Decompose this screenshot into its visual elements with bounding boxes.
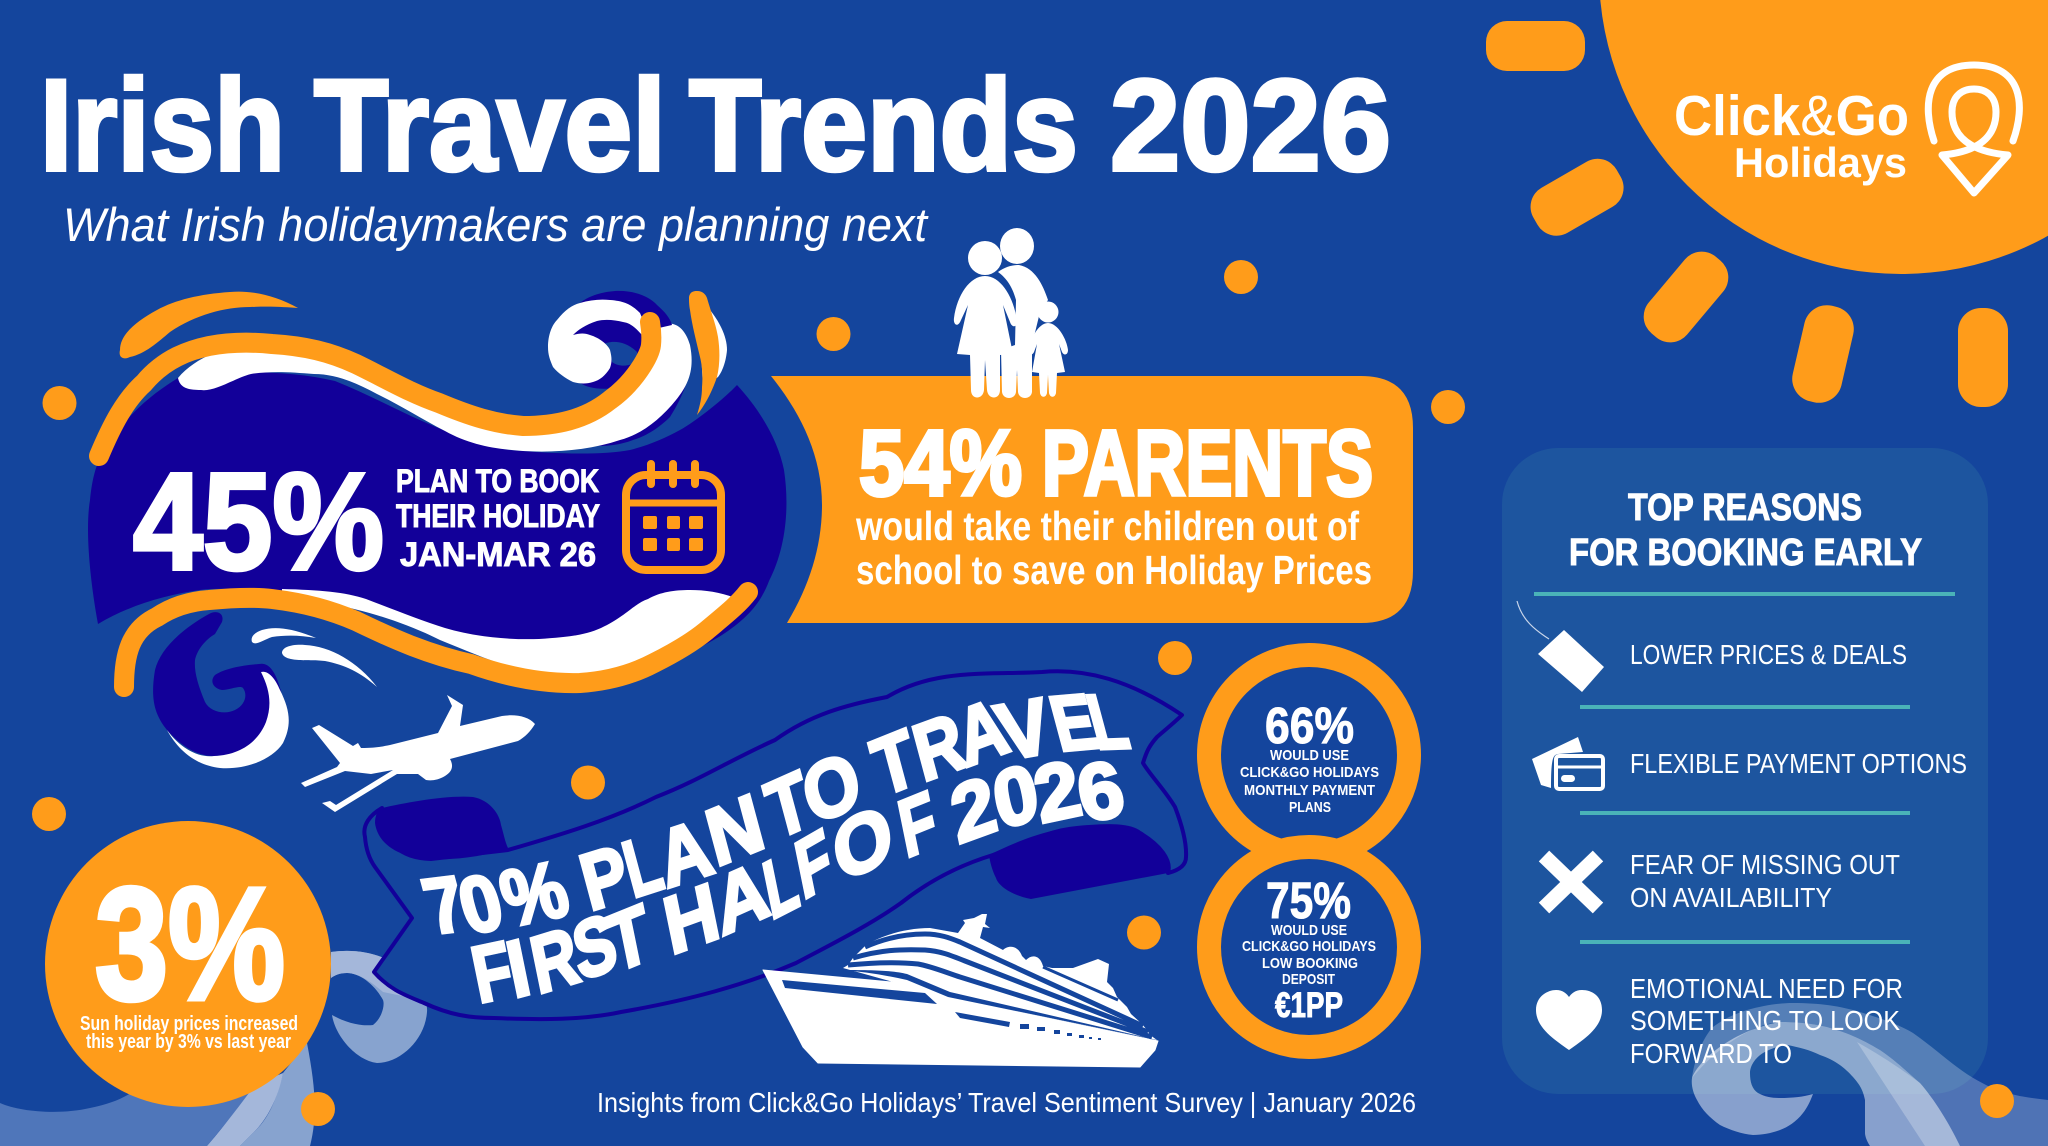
wave: bottom right [1692,1003,2048,1146]
wave: dark blob [88,372,786,675]
banner text line 2: 2 [1027,743,1088,840]
wave: small white splash 1 [252,628,316,643]
circle: 66 percent [1209,655,1409,855]
logo wordmark [1674,84,1909,186]
icon: cruise ship [763,914,1158,1067]
sun holiday text [80,1013,298,1053]
banner text line 2: O [826,786,900,900]
circle: 3 percent [45,821,331,1107]
banner text line 2: 0 [986,746,1046,847]
wave: lower white crest [282,589,735,680]
reason: emotional need: FORWARD TO [1630,1038,1792,1069]
banner text line 1: R [904,695,974,799]
low deposit text [1242,922,1376,988]
monthly payment text: PLANS [1289,799,1331,816]
plan to book text: JAN-MAR 26 [400,536,596,574]
logo wordmark: Holidays [1734,139,1907,186]
decorative orange dots [32,260,2014,1126]
banner text line 1: N [697,776,772,884]
panel: top reasons background [1502,448,1988,1094]
sun holiday text: Sun holiday prices increased [80,1013,298,1035]
wave: spike orange [689,291,719,415]
icon: plane [301,695,535,812]
title: Irish [40,52,285,198]
parents body text: school to save on Holiday Prices [856,547,1372,593]
banner text line 2: S [566,896,624,998]
monthly payment text: WOULD USE [1270,747,1349,764]
footer source note: Insights from Click&Go Holidays’ Travel Sentiment Survey | January 2026 [597,1087,1416,1118]
low deposit text: WOULD USE [1271,922,1347,939]
panel heading [1569,487,1922,574]
wave: lower swirl dark [153,612,281,756]
banner text line 1: % [491,845,577,944]
banner text line 2 [465,743,1131,1020]
panel heading: FOR BOOKING EARLY [1569,532,1922,574]
sun [1486,0,2048,407]
circle: 75 percent [1209,847,1409,1047]
banner text line 1: V [987,681,1060,777]
wave: curl inner lens [602,342,638,366]
monthly payment text [1240,747,1379,816]
panel: parents [771,376,1413,623]
banner text line 2: T [601,887,657,990]
title [40,52,1391,198]
banner text line 2: A [707,842,776,953]
wave: upper white crest [178,324,692,452]
logo wordmark: Click&Go [1674,84,1909,148]
ring [1209,847,1409,1047]
banner text line 2: I [500,923,537,1016]
54 percent parents heading [859,411,1373,515]
plan to book text: THEIR HOLIDAY [396,498,600,534]
parents body text: would take their children out of [855,503,1359,549]
plan to book text: PLAN TO BOOK [396,463,599,499]
3 percent number: 3% [95,854,285,1033]
banner: 70 percent [364,671,1186,1020]
low deposit text: LOW BOOKING [1262,955,1358,972]
banner text line 1: E [1042,678,1106,768]
reason: flexible payment: FLEXIBLE PAYMENT OPTIONS [1630,748,1967,779]
wave: dark crescent right [598,355,691,446]
banner text line 1: 7 [414,860,475,951]
wave: spike white [700,310,727,388]
wave: small white splash 2 [282,645,377,687]
plan to book text [396,463,600,574]
sun holiday text: this year by 3% vs last year [86,1031,291,1053]
45 percent number: 45% [133,445,384,599]
reason: emotional need: SOMETHING TO LOOK [1630,1005,1900,1036]
banner text line 2: L [756,833,805,937]
75 percent number: 75% [1266,872,1351,929]
banner text line 1: O [793,734,870,842]
ring [1209,655,1409,855]
monthly payment text: CLICK&GO HOLIDAYS [1240,764,1379,781]
sun disc [1599,0,2048,274]
banner text line 2: F [892,773,943,875]
sun rays [1486,21,2008,407]
banner text line 2: 2 [944,758,1003,861]
66 percent number: 66% [1265,697,1354,754]
parents body text [855,503,1372,593]
low deposit text: DEPOSIT [1282,971,1335,988]
monthly payment text: MONTHLY PAYMENT [1244,782,1375,799]
reason: emotional need [1630,973,1903,1069]
banner fold left [375,797,508,859]
wave panel: 45 percent wave [88,291,786,768]
icon: family [954,228,1068,398]
reason: fear of missing out: ON AVAILABILITY [1630,882,1832,913]
icon: calendar [626,464,721,570]
banner fold right [989,826,1169,899]
icon: credit cards [1532,737,1603,789]
wave: curl white [548,300,645,384]
banner text line 2: F [465,925,520,1020]
banner text line 1: L [1078,678,1137,766]
banner text line 2: 6 [1070,744,1131,839]
title: Travel [314,52,666,198]
panel: top reasons content [1517,487,1967,1069]
banner text line 2: F [789,811,838,917]
logo pin [1928,65,2019,193]
1 euro deposit: €1PP [1275,986,1343,1025]
54 percent parents heading: 54% [859,411,1022,515]
icon: cross [1544,856,1598,908]
wave: lower swirl white [167,672,289,768]
banner text line 1 [414,678,1137,951]
icon: price tag [1517,601,1604,692]
54 percent parents heading: PARENTS [1042,411,1373,515]
banner text line 2: H [656,865,726,972]
banner text line 2: R [524,910,586,1011]
logo: Click&Go Holidays [1674,65,2019,193]
reason: emotional need: EMOTIONAL NEED FOR [1630,973,1903,1004]
banner ribbon [364,671,1186,1019]
reason: lower prices: LOWER PRICES & DEALS [1630,639,1907,670]
banner text line 1: P [571,828,638,928]
panel heading: TOP REASONS [1628,487,1862,529]
low deposit text: CLICK&GO HOLIDAYS [1242,938,1376,955]
wave: curl dark [573,291,672,389]
banner text line 1: T [863,712,925,814]
icon: heart [1536,990,1602,1050]
banner text line 1: 0 [449,858,512,951]
banner text line 1: A [947,680,1017,784]
45 percent stat [133,445,600,599]
title: Trends [689,52,1078,198]
reason: fear of missing out: FEAR OF MISSING OUT [1630,849,1900,880]
title: 2026 [1110,52,1391,198]
wave: upper orange stroke [99,322,651,456]
banner text line 1: A [648,803,721,905]
banner text line 1: T [757,753,818,857]
reason: fear of missing out [1630,849,1900,913]
parents orange shape [771,376,1413,623]
wave: orange leaf [120,292,298,358]
banner text line 1: L [614,817,671,915]
wave: lower orange stroke [124,592,748,687]
subtitle: What Irish holidaymakers are planning next [63,198,929,251]
wave: bottom left [0,951,427,1146]
orange disc [45,821,331,1107]
